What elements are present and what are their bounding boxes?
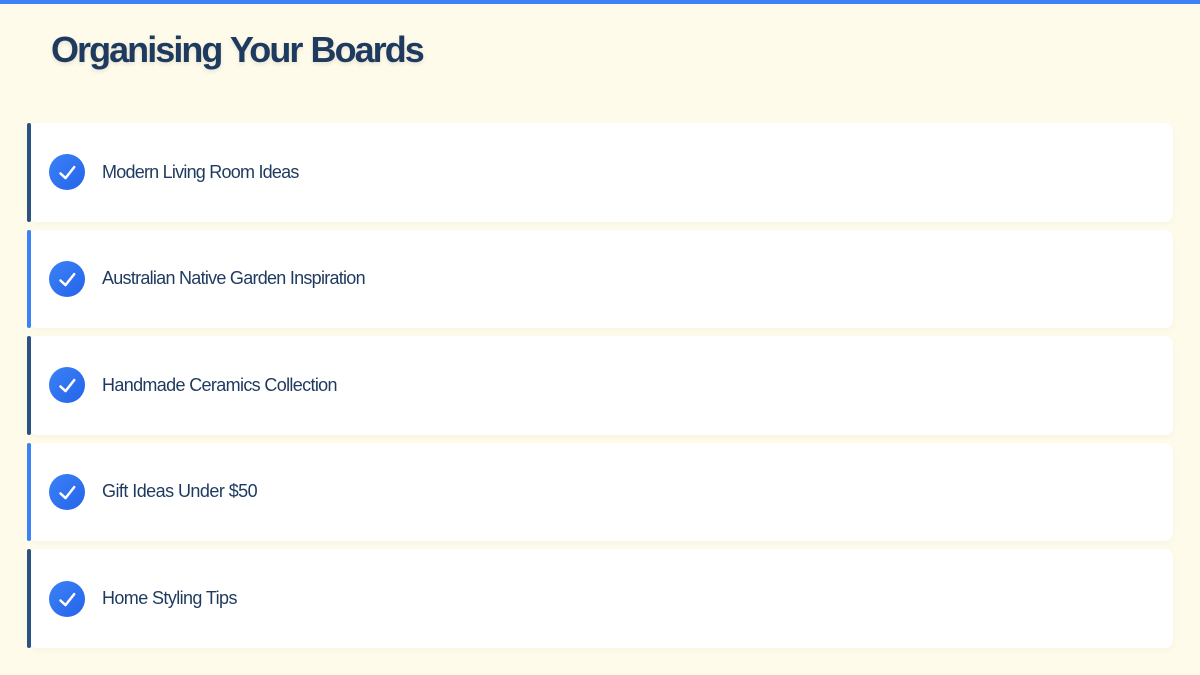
list item: Gift Ideas Under $50: [27, 443, 1173, 541]
icon: check circle: [49, 261, 85, 297]
item label: Handmade Ceramics Collection: [102, 375, 337, 395]
list item: Home Styling Tips: [27, 549, 1173, 648]
list item: Australian Native Garden Inspiration: [27, 230, 1173, 328]
item label: Modern Living Room Ideas: [102, 162, 299, 182]
title: Organising Your Boards: [51, 29, 423, 70]
item label: Australian Native Garden Inspiration: [102, 268, 365, 288]
icon: check circle: [49, 581, 85, 617]
icon: check circle: [49, 367, 85, 403]
icon: check circle: [49, 154, 85, 190]
top accent bar: [0, 0, 1200, 4]
icon: check circle: [49, 474, 85, 510]
list item: Modern Living Room Ideas: [27, 123, 1173, 222]
list item: Handmade Ceramics Collection: [27, 336, 1173, 435]
item label: Home Styling Tips: [102, 588, 237, 608]
item label: Gift Ideas Under $50: [102, 481, 257, 501]
